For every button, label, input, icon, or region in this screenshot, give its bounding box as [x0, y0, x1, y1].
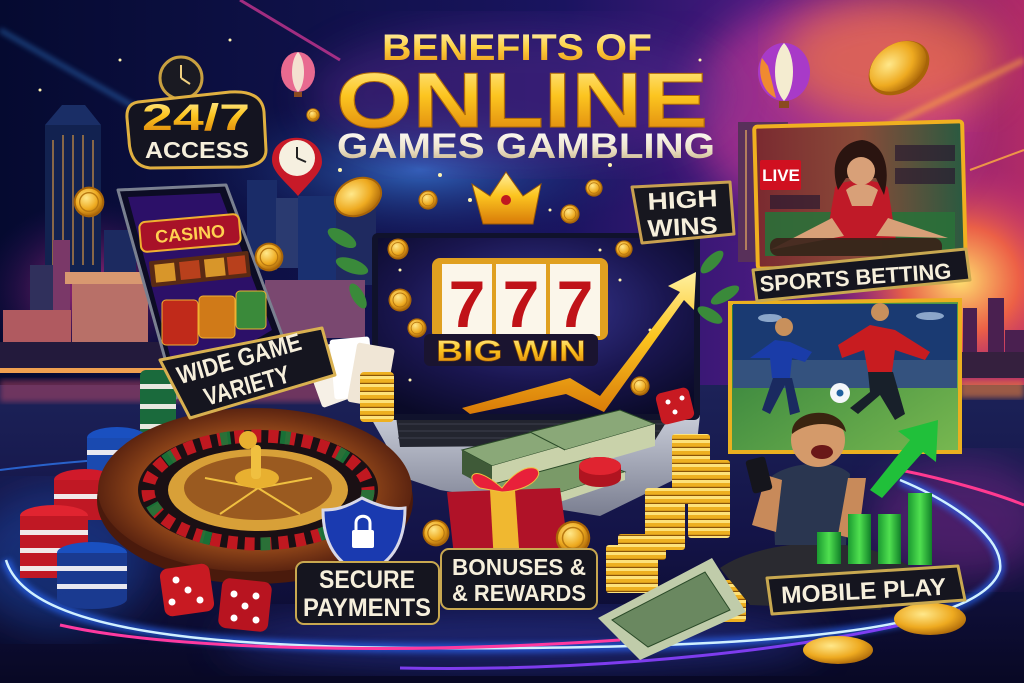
football panel — [730, 300, 960, 452]
slot machine: 7 — [503, 267, 539, 341]
text: live badge — [760, 160, 801, 190]
label: secure payments — [296, 562, 439, 624]
label: sports betting — [753, 249, 970, 301]
phone: casino — [118, 185, 282, 398]
label: mobile play — [767, 566, 965, 614]
skyline: right — [738, 122, 1024, 378]
coin decorations — [74, 29, 940, 555]
badge: 24/7 access: ACCESS — [145, 137, 249, 163]
icon: hot air balloon small — [281, 52, 315, 97]
roulette wheel — [97, 408, 413, 632]
live dealer panel: LIVE — [762, 166, 800, 185]
text: title — [336, 27, 715, 166]
label: bonuses and rewards: BONUSES & — [452, 554, 586, 580]
label: wide game variety — [160, 328, 335, 418]
label: bonuses and rewards: & REWARDS — [452, 580, 586, 606]
icon: clock — [160, 57, 202, 99]
leaves — [325, 224, 742, 327]
text: title: ONLINE — [336, 56, 708, 144]
playing cards — [303, 336, 395, 422]
icon: crown — [472, 172, 541, 224]
label: high wins — [632, 182, 734, 243]
player blue — [750, 340, 812, 378]
chart arrow — [462, 272, 696, 414]
badge: 24/7 access: 24/7 — [142, 97, 250, 138]
text: title: BENEFITS OF — [382, 27, 652, 68]
cash bundles — [462, 410, 655, 512]
icon: shield lock — [323, 498, 405, 574]
label: wide game variety: VARIETY — [201, 360, 293, 412]
floor — [0, 385, 1024, 683]
slot machine — [424, 258, 608, 368]
icon: hot air balloon large — [758, 43, 810, 108]
label: mobile play: MOBILE PLAY — [781, 574, 947, 609]
slot machine: 7 — [449, 267, 485, 341]
label: sports betting: SPORTS BETTING — [759, 258, 952, 297]
slot machine: 7 — [557, 267, 593, 341]
coin stacks and bills — [598, 434, 966, 664]
gift box — [447, 468, 570, 565]
label: secure payments: PAYMENTS — [303, 594, 431, 622]
phone: casino: CASINO — [154, 221, 226, 247]
label: high wins: WINS — [647, 212, 718, 243]
icon: dice — [159, 563, 272, 632]
chip stacks — [20, 370, 176, 609]
badge: 24/7 access — [127, 92, 266, 168]
label: wide game variety: WIDE GAME — [174, 328, 305, 390]
skyline: left — [0, 105, 376, 373]
green arrow — [870, 420, 938, 498]
player red — [838, 325, 930, 372]
label: bonuses and rewards — [441, 549, 597, 609]
live dealer panel — [754, 121, 966, 269]
label: high wins: HIGH — [647, 185, 718, 216]
text: title: GAMES GAMBLING — [337, 127, 715, 166]
man with phone — [720, 413, 915, 610]
swirling light ring — [0, 460, 1024, 668]
slot machine: BIG WIN — [436, 335, 586, 368]
label: secure payments: SECURE — [319, 566, 415, 594]
laptop — [372, 233, 700, 516]
text: big win — [424, 334, 598, 366]
icon: roulette clock pin — [272, 138, 322, 196]
green bars — [817, 493, 932, 565]
